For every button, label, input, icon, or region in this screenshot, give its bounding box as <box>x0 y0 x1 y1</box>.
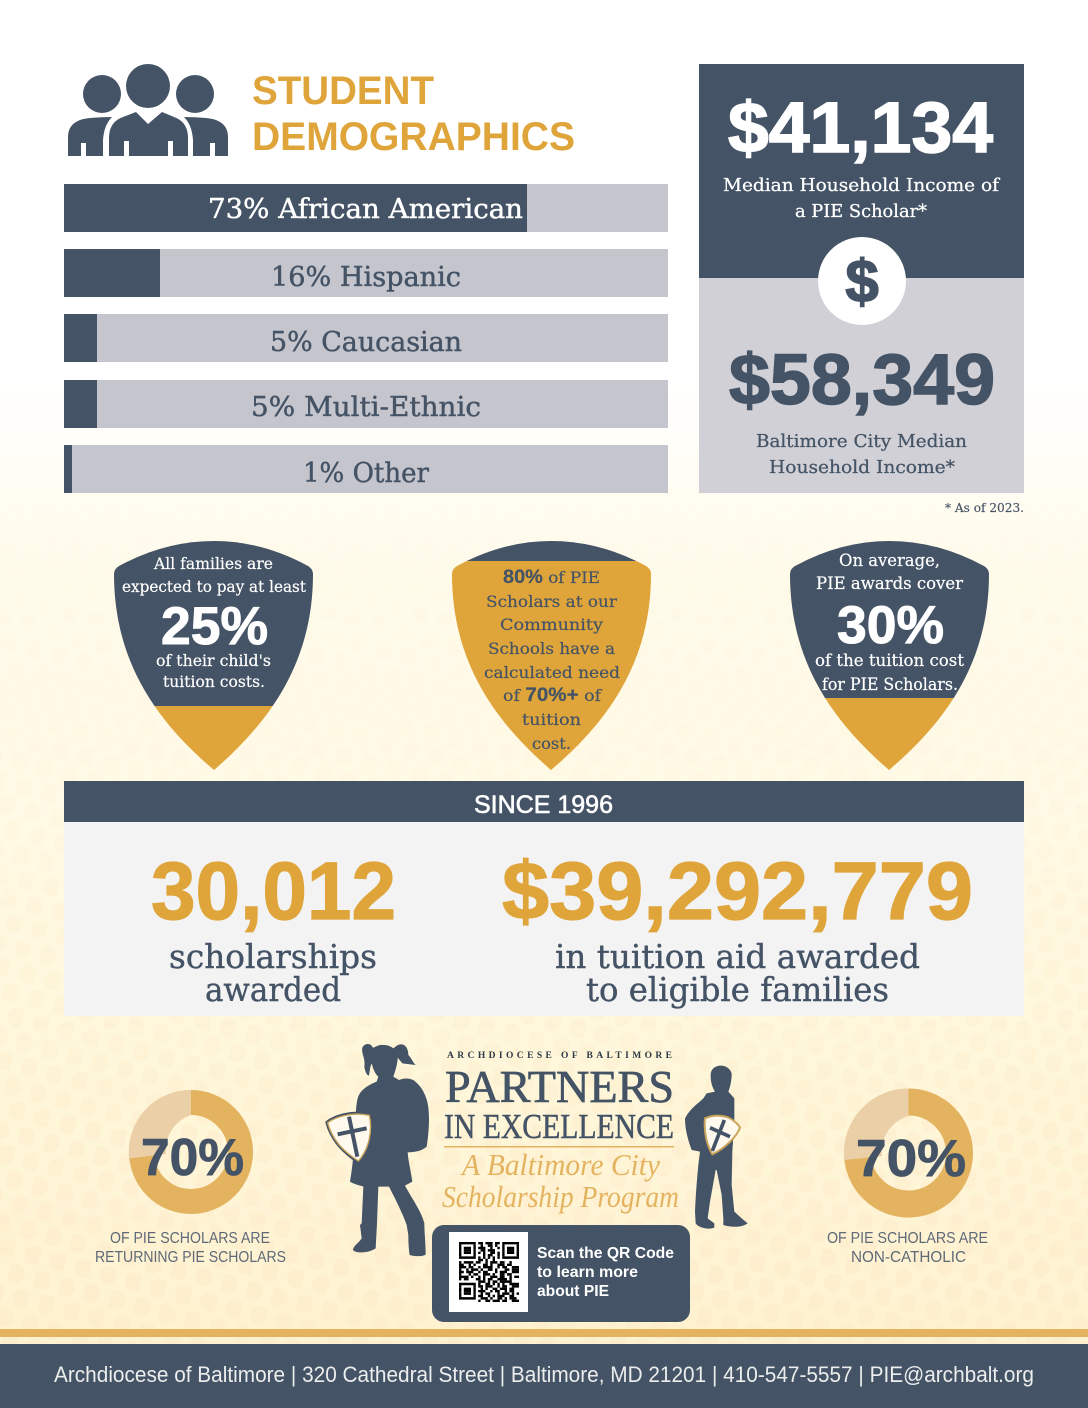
shield: 30 percent award coverage: 30% <box>837 596 944 655</box>
shield: 80 percent community schools: Community <box>500 615 603 634</box>
text: PIE scholar income label: Median Household Income of <box>723 175 1000 196</box>
shield: 30 percent award coverage: of the tuition cost <box>815 651 964 670</box>
donut: returning scholars: RETURNING PIE SCHOLARS <box>95 1249 286 1266</box>
shield: 80 percent community schools: 80% of PIE <box>503 567 600 588</box>
logo: Partners in Excellence wordmark: IN EXCELLENCE <box>444 1107 674 1146</box>
text: Baltimore City income label <box>756 431 967 478</box>
panel: since 1996 <box>64 781 1024 1016</box>
donut: non-Catholic scholars: NON-CATHOLIC <box>851 1249 966 1266</box>
logo: Partners in Excellence wordmark: A Baltimore City <box>460 1147 660 1182</box>
shield: 80 percent community schools <box>448 538 656 772</box>
stat: Baltimore City income: $58,349 <box>729 341 995 420</box>
banner: since 1996 <box>64 781 1024 822</box>
bar chart: demographics <box>64 184 668 493</box>
stat: tuition aid awarded: to eligible families <box>586 970 889 1009</box>
icon: dollar coin <box>818 237 906 325</box>
heading: student demographics: STUDENT <box>252 69 434 113</box>
stat: scholarships awarded: scholarships <box>169 937 377 976</box>
shield: 30 percent award coverage: PIE awards cover <box>816 574 963 593</box>
text: PIE scholar income label: a PIE Scholar* <box>795 201 927 222</box>
shield: 80 percent community schools: calculated need <box>484 663 620 682</box>
heading: student demographics <box>252 69 575 159</box>
text: scan instruction: to learn more <box>537 1264 638 1281</box>
qr code <box>449 1232 528 1312</box>
footnote: * As of 2023. <box>945 501 1024 515</box>
text: scan instruction: about PIE <box>537 1283 609 1300</box>
bar: Caucasian: 5% Caucasian <box>270 327 462 358</box>
stat: tuition aid awarded: $39,292,779 <box>502 846 973 937</box>
shield: 30 percent award coverage <box>786 538 994 772</box>
text: Baltimore City income label: Household Income* <box>769 457 955 478</box>
donut: returning scholars: 70% <box>141 1129 244 1187</box>
icon: girl silhouette with shield <box>327 1044 429 1256</box>
stat: PIE scholar income: $41,134 <box>728 89 994 168</box>
shield: 25 percent family contribution: of their child's <box>156 652 271 670</box>
heading: student demographics: DEMOGRAPHICS <box>252 115 575 159</box>
panel: household income comparison <box>699 64 1024 493</box>
footer: contact bar <box>0 1329 1088 1408</box>
icon: group of students <box>68 64 228 156</box>
callout: QR code box <box>432 1225 690 1322</box>
bar: Multi-Ethnic <box>64 380 668 428</box>
text: scan instruction <box>537 1245 674 1300</box>
stat: tuition aid awarded <box>502 846 973 1009</box>
shield: 80 percent community schools: cost. <box>532 734 571 753</box>
shield: 30 percent award coverage: for PIE Scholars. <box>822 675 958 694</box>
bar: Caucasian <box>64 314 668 362</box>
stat: tuition aid awarded: in tuition aid awarded <box>555 937 920 976</box>
icon: girl's shield <box>327 1113 371 1162</box>
icon: boy silhouette with shield <box>685 1066 748 1229</box>
stat: scholarships awarded: 30,012 <box>151 846 396 937</box>
shield: 80 percent community schools: tuition <box>522 710 581 729</box>
bar: Multi-Ethnic: 5% Multi-Ethnic <box>251 392 481 423</box>
bar: Other <box>64 445 668 493</box>
donut: non-Catholic scholars: OF PIE SCHOLARS ARE <box>827 1230 988 1247</box>
bar: Other: 1% Other <box>303 458 429 489</box>
shield: 25 percent family contribution <box>110 538 318 772</box>
bar: Hispanic <box>64 249 668 297</box>
stat: scholarships awarded <box>151 846 396 1009</box>
text: PIE scholar income label <box>723 175 1000 222</box>
donut: non-Catholic scholars: 70% <box>856 1130 966 1188</box>
bar: African American: 73% African American <box>208 194 523 225</box>
logo: Partners in Excellence wordmark: PARTNERS <box>445 1061 674 1112</box>
logo: Partners in Excellence wordmark: ARCHDIOCESE OF BALTIMORE <box>447 1051 672 1061</box>
stat: scholarships awarded: awarded <box>205 970 341 1009</box>
banner: since 1996: SINCE 1996 <box>474 791 613 819</box>
text: scan instruction: Scan the QR Code <box>537 1245 674 1262</box>
footer: contact bar: Archdiocese of Baltimore | 320 Cathedral Street | Baltimore, MD 21201 | 410-547-5557 | PIE@archbalt.org <box>54 1362 1034 1387</box>
text: Baltimore City income label: Baltimore City Median <box>756 431 967 452</box>
icon: boy's shield <box>705 1116 740 1154</box>
icon: dollar coin: $ <box>845 248 879 315</box>
donut: non-Catholic scholars <box>827 1088 988 1266</box>
shield: 80 percent community schools: Schools have a <box>488 639 615 658</box>
donut: returning scholars <box>95 1090 286 1266</box>
shield: 80 percent community schools: Scholars at our <box>486 592 617 611</box>
bar: African American <box>64 184 668 232</box>
shield: 30 percent award coverage: On average, <box>839 551 940 570</box>
shield: 25 percent family contribution: 25% <box>161 597 268 656</box>
donut: returning scholars: OF PIE SCHOLARS ARE <box>110 1230 270 1247</box>
shield: 25 percent family contribution: All families are <box>153 555 273 573</box>
shield: 25 percent family contribution: expected to pay at least <box>122 578 307 596</box>
logo: Partners in Excellence wordmark: Scholarship Program <box>442 1179 679 1214</box>
shield: 25 percent family contribution: tuition costs. <box>163 673 265 691</box>
page background <box>0 454 1088 1344</box>
shield: 80 percent community schools: of 70%+ of <box>503 685 602 706</box>
bar: Hispanic: 16% Hispanic <box>271 262 461 293</box>
logo: Partners in Excellence wordmark <box>442 1051 679 1214</box>
